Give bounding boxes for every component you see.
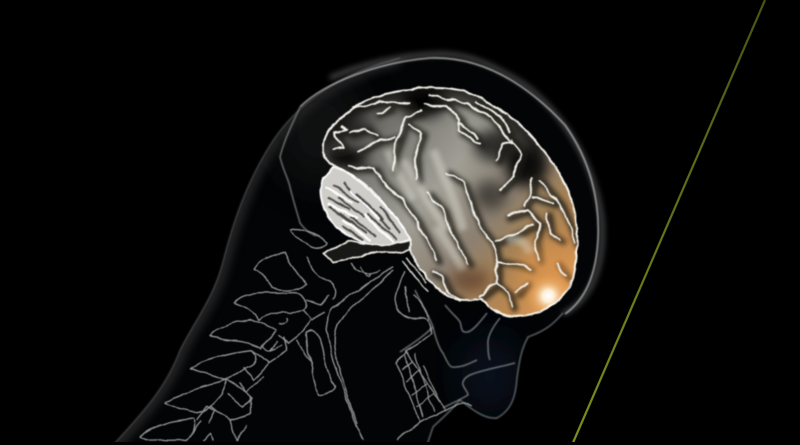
spinous processes bbox=[254, 253, 307, 291]
airway bbox=[327, 267, 393, 440]
dark bottom strip bbox=[0, 442, 800, 445]
inner skull line bbox=[280, 107, 316, 236]
brain body bbox=[323, 87, 577, 317]
brain stem bbox=[323, 241, 428, 292]
shading on gyri bbox=[323, 87, 578, 319]
sulcus shadows bbox=[336, 97, 578, 309]
skeleton: neck vertebrae, jaw and teeth bbox=[140, 229, 473, 441]
facial bone lines bbox=[400, 290, 515, 408]
upper cervical region bbox=[290, 229, 327, 248]
diagonal olive line bbox=[572, 0, 765, 445]
vertebra bodies bbox=[303, 295, 330, 320]
sulci bbox=[333, 95, 575, 307]
cerebellum bbox=[321, 167, 410, 247]
brain bbox=[321, 87, 578, 319]
brain outline bbox=[323, 87, 577, 317]
head silhouette bbox=[113, 54, 602, 445]
jaw bbox=[396, 272, 432, 352]
teeth bbox=[402, 353, 442, 417]
